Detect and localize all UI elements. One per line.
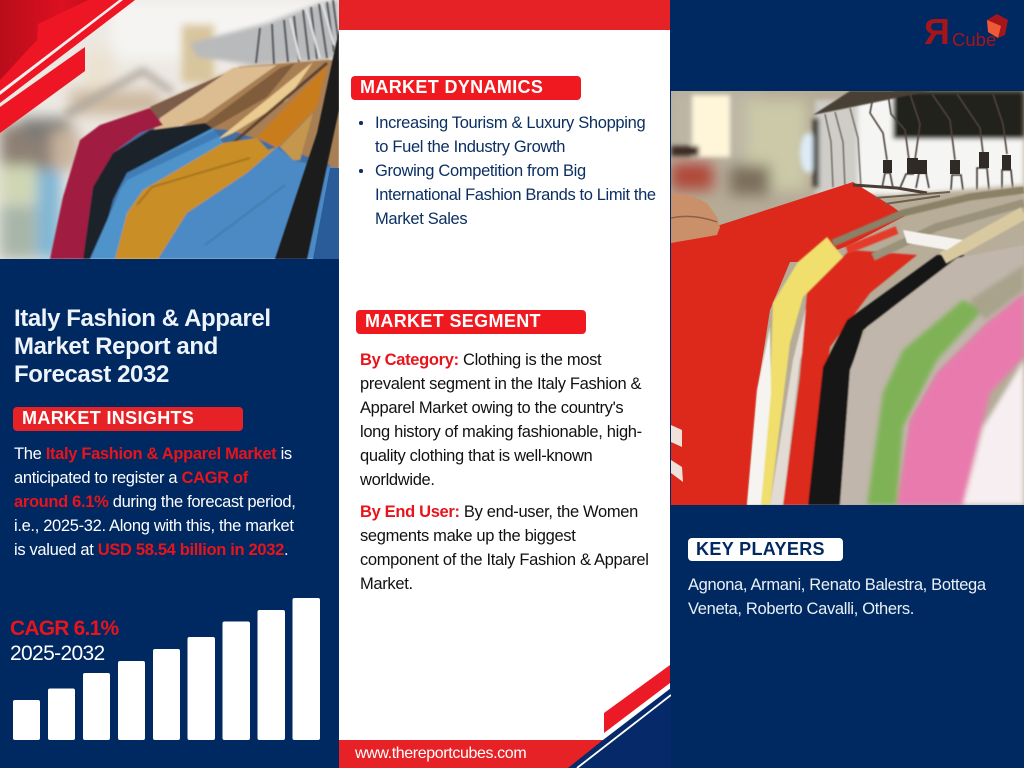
light blue shirts bbox=[90, 128, 223, 259]
black strap bbox=[275, 30, 339, 259]
text block: by end user: Market. bbox=[360, 575, 413, 593]
panel: right navy column bbox=[671, 0, 1024, 768]
hangers bbox=[150, 67, 243, 123]
crimson sweater bbox=[50, 108, 163, 259]
rail bbox=[813, 91, 930, 115]
panel: left navy column bbox=[0, 259, 338, 768]
text block: by category: Apparel Market owing to the country's bbox=[360, 399, 623, 417]
heading: market insights: MARKET INSIGHTS bbox=[22, 408, 194, 428]
chart label: years: 2025-2032 bbox=[10, 642, 105, 665]
text block: market dynamics bullets bbox=[359, 114, 656, 228]
bullet one bbox=[359, 114, 645, 156]
bullet one: Increasing Tourism & Luxury Shopping bbox=[375, 114, 645, 132]
text block: by category: quality clothing that is well-known bbox=[360, 447, 592, 465]
text block: by category: worldwide. bbox=[360, 471, 435, 489]
text block: key players bbox=[688, 576, 986, 618]
title: Italy Fashion & Apparel bbox=[14, 305, 271, 332]
heading: key players: KEY PLAYERS bbox=[696, 539, 825, 559]
hook cluster blurred end bbox=[190, 0, 338, 65]
text block: key players: Agnona, Armani, Renato Balestra, Bottega bbox=[688, 576, 986, 594]
red corner ribbons bbox=[0, 0, 122, 93]
text block: market insights: anticipated to register a CAGR of bbox=[14, 469, 248, 487]
logo cube icon bbox=[987, 14, 1008, 38]
text block: market insights: is valued at USD 58.54 billion in 2032. bbox=[14, 541, 288, 559]
hooks bbox=[825, 94, 1013, 190]
hand bbox=[671, 193, 720, 243]
logo: RCube bbox=[924, 11, 1008, 52]
text block: by end user bbox=[360, 503, 649, 593]
panel: centre white column bbox=[339, 0, 670, 768]
text block: by category bbox=[360, 351, 642, 489]
footer: red bar and navy corner ribbons bbox=[339, 665, 671, 768]
photo: hand holding red shirt on rack bbox=[671, 91, 1024, 505]
mustard shirt bbox=[115, 138, 277, 259]
chart label: CAGR value: CAGR 6.1% bbox=[10, 617, 118, 640]
heading: market segment bbox=[356, 310, 586, 334]
bullet two: International Fashion Brands to Limit the bbox=[375, 186, 656, 204]
hanger bar bbox=[853, 185, 927, 193]
photo: clothes on a rack with red corner ribbons bbox=[0, 0, 339, 259]
footer: website address: www.thereportcubes.com bbox=[355, 745, 526, 762]
text block: by category: long history of making fashionable, high- bbox=[360, 423, 642, 441]
text block: by category: By Category: Clothing is the most bbox=[360, 351, 601, 369]
banner: top red strip bbox=[339, 0, 670, 30]
text block: by end user: By End User: By end-user, the Women bbox=[360, 503, 638, 521]
text block: by category: prevalent segment in the Italy Fashion & bbox=[360, 375, 641, 393]
title: Market Report and bbox=[14, 333, 218, 360]
title: Forecast 2032 bbox=[14, 361, 169, 388]
heading: market insights bbox=[13, 407, 243, 431]
text block: market insights: around 6.1% during the forecast period, bbox=[14, 493, 296, 511]
logo wordmark: Cube bbox=[952, 29, 996, 50]
heading: market dynamics: MARKET DYNAMICS bbox=[360, 77, 543, 97]
black shirt bbox=[83, 123, 215, 259]
blurred garments bbox=[747, 237, 1024, 505]
text block: by end user: segments make up the biggest bbox=[360, 527, 575, 545]
text block: key players: Veneta, Roberto Cavalli, Others. bbox=[688, 600, 914, 618]
logo mark letter: Я bbox=[924, 11, 950, 52]
bullet two bbox=[359, 162, 656, 228]
text block: by end user: component of the Italy Fashion & Apparel bbox=[360, 551, 649, 569]
text block: market insights: i.e., 2025-32. Along with this, the market bbox=[14, 517, 294, 535]
text block: market insights: The Italy Fashion & Apparel Market is bbox=[14, 445, 292, 463]
bullet one: to Fuel the Industry Growth bbox=[375, 138, 565, 156]
text block: market insights bbox=[14, 445, 296, 559]
background behind lower hangers bbox=[900, 185, 1024, 330]
bullet two: Market Sales bbox=[375, 210, 467, 228]
title bbox=[14, 305, 271, 388]
chart: CAGR rising bars bbox=[13, 598, 320, 740]
hook wires bbox=[256, 0, 338, 64]
hanger bands bbox=[833, 190, 1024, 258]
big blue shirt bbox=[158, 147, 338, 259]
bullet two: Growing Competition from Big bbox=[375, 162, 586, 180]
hook coils bbox=[883, 152, 1011, 174]
garment backing bbox=[150, 60, 339, 170]
side stripes bbox=[671, 425, 683, 482]
red shirt bbox=[670, 182, 905, 505]
heading: market dynamics bbox=[351, 76, 581, 100]
heading: market segment: MARKET SEGMENT bbox=[365, 311, 541, 331]
